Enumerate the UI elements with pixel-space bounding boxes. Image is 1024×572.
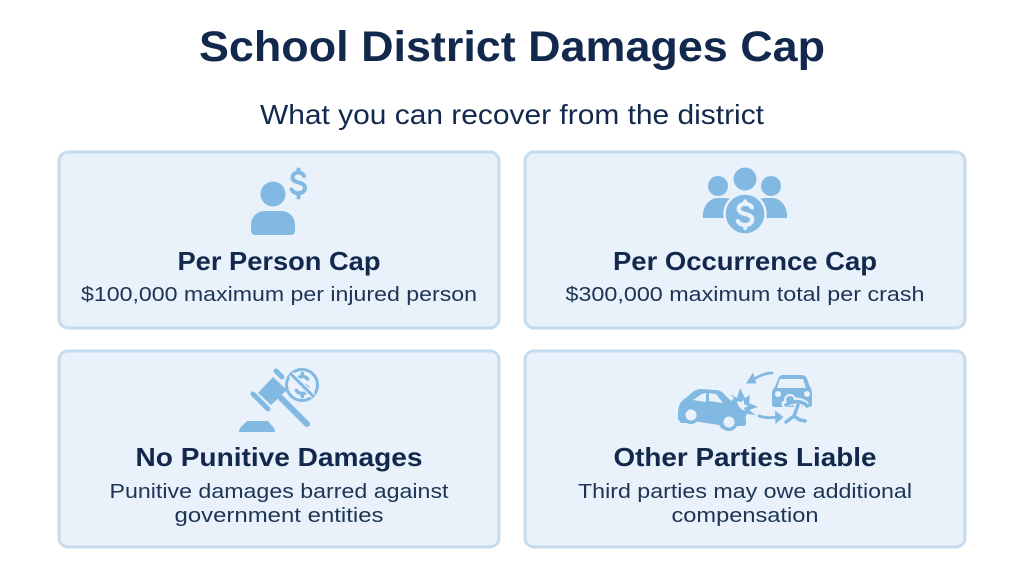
heading: Per Occurrence Cap: [613, 246, 877, 276]
icon: group with dollar coin: [703, 168, 787, 234]
panel: per occurrence cap: [525, 152, 965, 328]
description: Third parties may owe additional: [578, 480, 912, 503]
heading: No Punitive Damages: [136, 442, 422, 472]
heading: Per Person Cap: [178, 246, 380, 276]
panel: no punitive damages: [59, 351, 499, 547]
icon: gavel with crossed-out dollar: [239, 370, 318, 432]
description: compensation: [672, 504, 818, 527]
description: $100,000 maximum per injured person: [81, 283, 477, 306]
description: Punitive damages barred against: [110, 480, 449, 503]
description: [110, 480, 449, 527]
description: $300,000 maximum total per crash: [566, 283, 924, 306]
panel: per person cap: [59, 152, 499, 328]
icon: person with dollar sign: [251, 170, 305, 235]
subtitle: What you can recover from the district: [260, 99, 764, 130]
icon: car crash with third party: [678, 372, 812, 431]
title: School District Damages Cap: [199, 23, 825, 71]
heading: Other Parties Liable: [614, 442, 876, 472]
description: [578, 480, 912, 527]
panel: other parties liable: [525, 351, 965, 547]
description: government entities: [174, 504, 384, 527]
